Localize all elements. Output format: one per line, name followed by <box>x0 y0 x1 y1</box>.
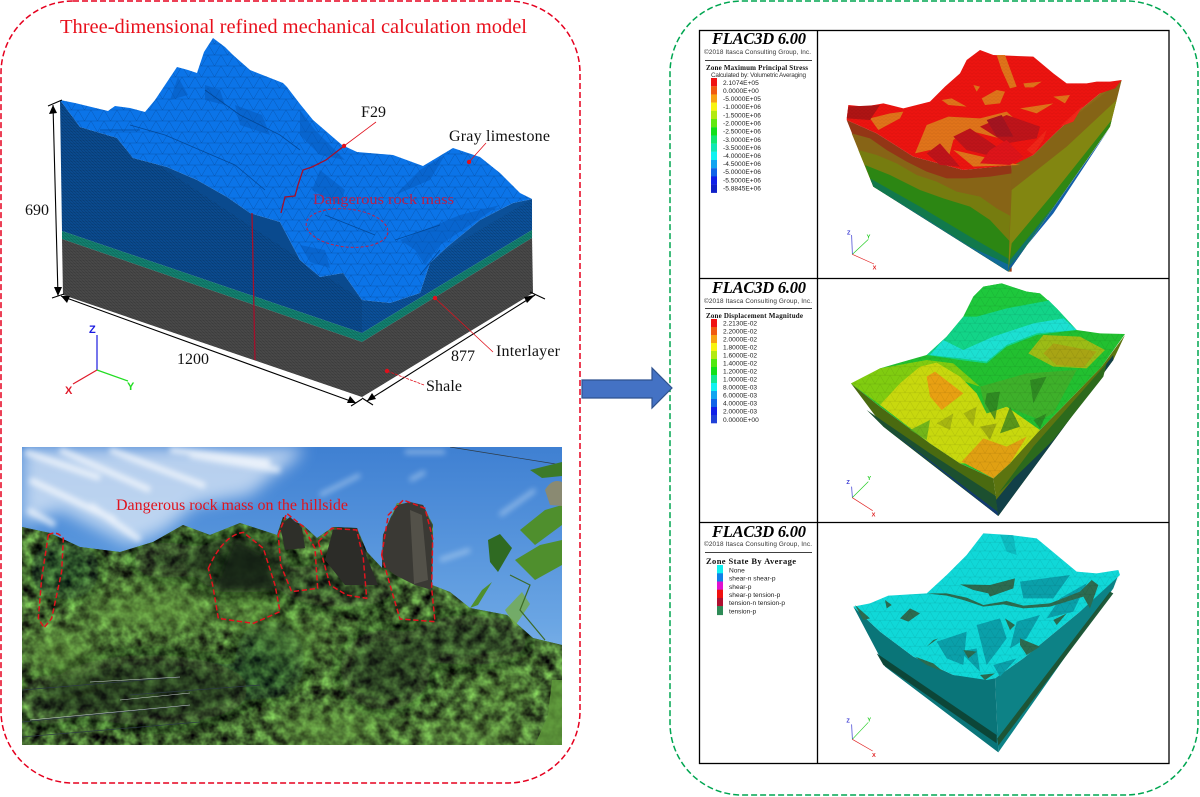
axis triad: X <box>873 266 877 272</box>
legend: zone displacement magnitude: 1.8000E-02 <box>723 344 757 352</box>
legend: zone displacement magnitude: 2.0000E-02 <box>723 336 757 344</box>
legend: zone displacement magnitude: 2.0000E-03 <box>723 409 757 416</box>
legend: zone maximum principal stress: -3.0000E+06 <box>723 137 761 144</box>
photo caption: Dangerous rock mass on the hillside <box>116 497 348 514</box>
legend: zone state by average <box>704 522 812 615</box>
axis triad <box>846 476 876 519</box>
legend: zone maximum principal stress: -2.0000E+06 <box>723 120 761 128</box>
block side faces <box>851 335 1125 516</box>
panel: numerical results (green dashed frame) <box>670 1 1198 795</box>
legend: zone state by average: Zone State By Average <box>706 556 796 566</box>
legend: zone maximum principal stress: -4.0000E+06 <box>723 153 761 160</box>
label interlayer with leader: Interlayer <box>496 343 561 360</box>
legend: zone state by average: None <box>729 568 745 574</box>
legend: zone maximum principal stress: -4.5000E+06 <box>723 161 761 168</box>
legend: zone state by average: shear-p tension-p <box>729 592 781 599</box>
axis triad: Z <box>846 480 850 486</box>
state colour scale <box>717 565 723 615</box>
legend: zone state by average: FLAC3D 6.00 <box>711 522 806 541</box>
legend: zone maximum principal stress <box>704 29 812 193</box>
legend: zone displacement magnitude: 1.2000E-02 <box>723 369 757 376</box>
right face colour bands <box>1008 80 1122 272</box>
axis triad: Y <box>867 476 871 482</box>
dangerous rock mass label: Dangerous rock mass <box>313 192 454 208</box>
legend: zone displacement magnitude: 8.0000E-03 <box>723 385 757 392</box>
legend: zone maximum principal stress: -3.5000E+06 <box>723 145 761 152</box>
label shale with leader <box>385 369 462 395</box>
legend: zone state by average: tension-n tension-p <box>729 600 785 607</box>
label F29 with leader: F29 <box>361 104 386 121</box>
orange patches <box>870 55 1070 167</box>
3D geological block model <box>60 38 533 397</box>
orange zones <box>927 372 963 410</box>
mid green zone with shaded facets <box>980 370 1077 420</box>
legend: zone displacement magnitude: 6.0000E-03 <box>723 393 757 400</box>
panel: model and field photo (red dashed frame) <box>1 1 580 783</box>
stress model render <box>847 50 1122 272</box>
legend: zone displacement magnitude: 1.4000E-02 <box>723 360 757 368</box>
legend: zone displacement magnitude: 4.0000E-03 <box>723 401 757 408</box>
label F29 with leader <box>342 104 386 148</box>
sky <box>22 447 562 645</box>
colour scale <box>711 78 717 193</box>
interlayer <box>62 230 532 342</box>
colour scale <box>711 319 717 423</box>
dangerous rock mass outline <box>304 205 390 251</box>
upper right yellow zone <box>1028 335 1105 368</box>
axis triad: Z <box>847 231 851 237</box>
axis triad: Z <box>89 324 96 336</box>
tree cover <box>20 500 562 750</box>
legend: zone maximum principal stress: -5.0000E+06 <box>723 169 761 176</box>
cyan terrain surface <box>853 533 1120 680</box>
legend: zone state by average: shear-n shear-p <box>729 576 776 582</box>
legend: zone maximum principal stress: -5.5000E+06 <box>723 177 761 184</box>
axis triad <box>846 718 876 759</box>
legend: zone maximum principal stress: Calculated by: Volumetric Averaging <box>711 72 806 79</box>
legend: zone displacement magnitude: 1.6000E-02 <box>723 352 757 360</box>
label gray limestone with leader <box>449 128 550 164</box>
dashed outlines of dangerous rock masses <box>38 500 435 628</box>
terrain shaded facets <box>170 77 500 268</box>
legend: zone maximum principal stress: ©2018 Itasca Consulting Group, Inc. <box>704 48 811 56</box>
terrain ridge lines <box>100 90 440 275</box>
stress surface <box>847 50 1122 170</box>
legend: zone maximum principal stress: 0.0000E+00 <box>723 88 759 95</box>
legend: zone displacement magnitude: Zone Displacement Magnitude <box>706 312 803 320</box>
legend: zone displacement magnitude: 2.2130E-02 <box>723 320 757 328</box>
red and shaded facets <box>847 105 1083 167</box>
foliage shadows <box>20 537 530 725</box>
cyan band <box>930 318 1077 362</box>
block side faces <box>853 575 1118 752</box>
dimension 877: 877 <box>451 348 475 365</box>
arrow from model to results <box>582 368 672 408</box>
left face colour bands <box>847 120 1012 272</box>
legend: zone displacement magnitude <box>704 278 812 424</box>
legend: zone displacement magnitude: ©2018 Itasca Consulting Group, Inc. <box>704 297 812 305</box>
yellow-green zone <box>851 360 980 405</box>
legend: zone state by average: shear-p <box>729 584 752 591</box>
results frame with panel dividers <box>699 30 1169 764</box>
legend: zone maximum principal stress: Zone Maximum Principal Stress <box>706 64 808 72</box>
clouds <box>22 447 535 560</box>
label shale with leader: Shale <box>426 378 462 395</box>
fault F29 trace <box>252 146 344 360</box>
right face: gray limestone side <box>362 199 532 333</box>
shaded facets <box>937 535 1087 677</box>
legend: zone maximum principal stress: -1.0000E+06 <box>723 104 761 111</box>
legend: zone displacement magnitude: 0.0000E+00 <box>723 417 759 424</box>
axis triad: Y <box>127 381 135 393</box>
dimension arrows <box>48 100 545 406</box>
left face: gray limestone side <box>60 100 362 333</box>
legend: zone displacement magnitude: FLAC3D 6.00 <box>711 278 806 297</box>
legend: zone state by average: ©2018 Itasca Consulting Group, Inc. <box>704 540 812 548</box>
displacement model render <box>846 283 1125 519</box>
axis triad: X <box>872 753 876 759</box>
terrain base green <box>851 283 1125 478</box>
legend: zone maximum principal stress: -5.8845E+06 <box>723 186 761 192</box>
label interlayer with leader <box>433 296 561 360</box>
axis triad <box>847 231 877 272</box>
axis triad <box>65 324 135 397</box>
legend: zone displacement magnitude: 2.2000E-02 <box>723 328 757 336</box>
tension zone patches <box>855 578 1098 680</box>
rock pillars <box>215 502 432 590</box>
legend: zone maximum principal stress: -2.5000E+06 <box>723 129 761 136</box>
foreground branch leaves <box>470 462 562 745</box>
teal zone <box>927 300 1077 363</box>
legend: zone maximum principal stress: 2.1074E+05 <box>723 80 759 87</box>
axis triad: X <box>65 385 73 397</box>
axis triad: Z <box>846 719 850 725</box>
axis triad: Y <box>867 718 871 724</box>
legend: zone maximum principal stress: -1.5000E+06 <box>723 112 761 119</box>
dimension 690: 690 <box>25 202 49 219</box>
power lines <box>22 447 562 737</box>
legend: zone state by average: tension-p <box>729 608 756 615</box>
peak green zone <box>963 283 1048 317</box>
yellow zone <box>880 363 1040 463</box>
field photograph of the hillside <box>20 447 562 750</box>
legend: zone maximum principal stress: FLAC3D 6.00 <box>711 29 806 48</box>
label gray limestone with leader: Gray limestone <box>449 128 550 145</box>
axis triad: X <box>872 513 876 519</box>
legend: zone displacement magnitude: 1.0000E-02 <box>723 377 757 384</box>
dimension 1200: 1200 <box>177 351 209 368</box>
title: Three-dimensional refined mechanical calculation model <box>60 16 527 38</box>
terrain surface <box>60 38 532 303</box>
legend: zone maximum principal stress: -5.0000E+05 <box>723 96 761 103</box>
foliage highlights <box>20 585 540 750</box>
zone state model render <box>846 533 1120 759</box>
shale <box>62 238 533 397</box>
axis triad: Y <box>867 235 871 241</box>
